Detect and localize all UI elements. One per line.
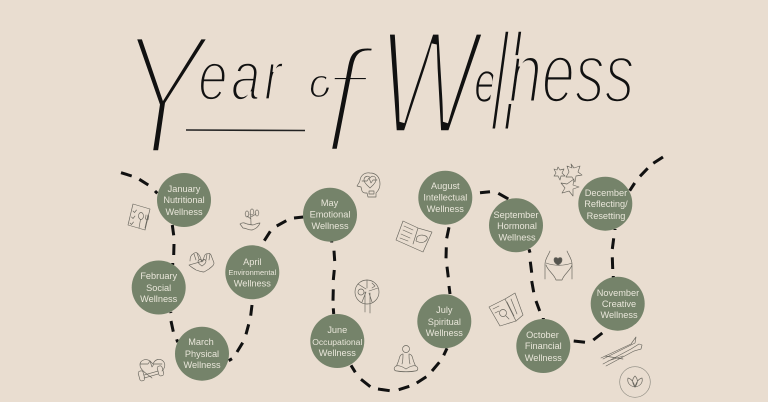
circle: June bbox=[310, 314, 364, 368]
circle: December: Reflecting/ bbox=[584, 199, 628, 209]
circle: October bbox=[516, 319, 570, 373]
circle: December: December bbox=[585, 188, 627, 198]
title: ness bbox=[509, 26, 634, 121]
circle: March: March bbox=[188, 337, 214, 347]
title: f bbox=[322, 17, 377, 185]
circle: January: January bbox=[168, 184, 201, 194]
title: Y bbox=[118, 0, 214, 192]
circle: February: February bbox=[140, 271, 177, 281]
circle: October: Financial bbox=[525, 341, 562, 351]
circle: February: Wellness bbox=[140, 294, 178, 304]
title underline bbox=[186, 129, 305, 132]
circle: May: May bbox=[321, 198, 339, 208]
circle: July: Wellness bbox=[426, 328, 463, 338]
circle: April: April bbox=[243, 257, 261, 267]
icon: underwear with heart bbox=[545, 251, 572, 280]
circle: March: Physical bbox=[185, 349, 219, 359]
circle: April: Wellness bbox=[234, 278, 271, 288]
circle: August bbox=[418, 171, 472, 225]
title: ear bbox=[198, 38, 285, 116]
circle: May: Emotional bbox=[310, 210, 350, 220]
icon: paint brushes bbox=[601, 337, 642, 366]
circle: September: September bbox=[494, 210, 538, 220]
circle: July: July bbox=[436, 305, 453, 315]
circle: May: Wellness bbox=[311, 221, 349, 231]
icon: heart and dumbbell bbox=[138, 359, 165, 381]
icon: occupational wheel bbox=[355, 280, 379, 313]
icon: stars bbox=[554, 164, 582, 196]
circle: July: Spiritual bbox=[428, 317, 461, 327]
icon: open book with brain bbox=[396, 221, 432, 252]
icon: checklist and cutlery bbox=[128, 204, 150, 230]
circle: August: August bbox=[431, 181, 460, 191]
circle: December bbox=[578, 177, 632, 231]
circle: October: Wellness bbox=[525, 353, 562, 363]
circle: February bbox=[132, 260, 186, 314]
circle: March: Wellness bbox=[183, 360, 221, 370]
circle: February: Social bbox=[146, 283, 171, 293]
circle: September: Wellness bbox=[498, 232, 536, 242]
circle: March bbox=[175, 327, 229, 381]
circle: June: Occupational bbox=[312, 337, 362, 347]
icon: lotus in circle bbox=[620, 367, 650, 397]
circle: September bbox=[489, 198, 543, 252]
title: W bbox=[378, 0, 486, 166]
circle: June: Wellness bbox=[319, 348, 356, 358]
circle: June: June bbox=[327, 325, 347, 335]
icon: meditating person bbox=[394, 346, 418, 372]
circle: November bbox=[591, 277, 645, 331]
circle: January: Wellness bbox=[165, 207, 203, 217]
title: ll bbox=[487, 1, 525, 164]
dashed journey path bbox=[121, 157, 663, 391]
title: e bbox=[474, 50, 497, 115]
icon: hand with plant bbox=[240, 209, 260, 230]
circle: April: Environmental bbox=[228, 268, 277, 277]
circle: October: October bbox=[526, 330, 559, 340]
circle: April bbox=[225, 245, 279, 299]
title bbox=[118, 0, 634, 192]
icon: hands holding hearts bbox=[189, 253, 214, 272]
circle: December: Resetting bbox=[587, 211, 625, 221]
circle: November: November bbox=[597, 288, 639, 298]
circle: August: Wellness bbox=[427, 204, 464, 214]
circle: August: Intellectual bbox=[423, 192, 467, 202]
circle: July bbox=[417, 294, 471, 348]
title: o bbox=[309, 62, 331, 106]
circle: January: Nutritional bbox=[163, 195, 205, 205]
circle: September: Hormonal bbox=[497, 221, 537, 231]
circle: November: Creative bbox=[602, 299, 636, 309]
circle: May bbox=[303, 188, 357, 242]
circle: January bbox=[157, 173, 211, 227]
icon: financial documents bbox=[489, 293, 523, 326]
circle: November: Wellness bbox=[600, 310, 638, 320]
icon: head with heart bbox=[357, 173, 380, 197]
